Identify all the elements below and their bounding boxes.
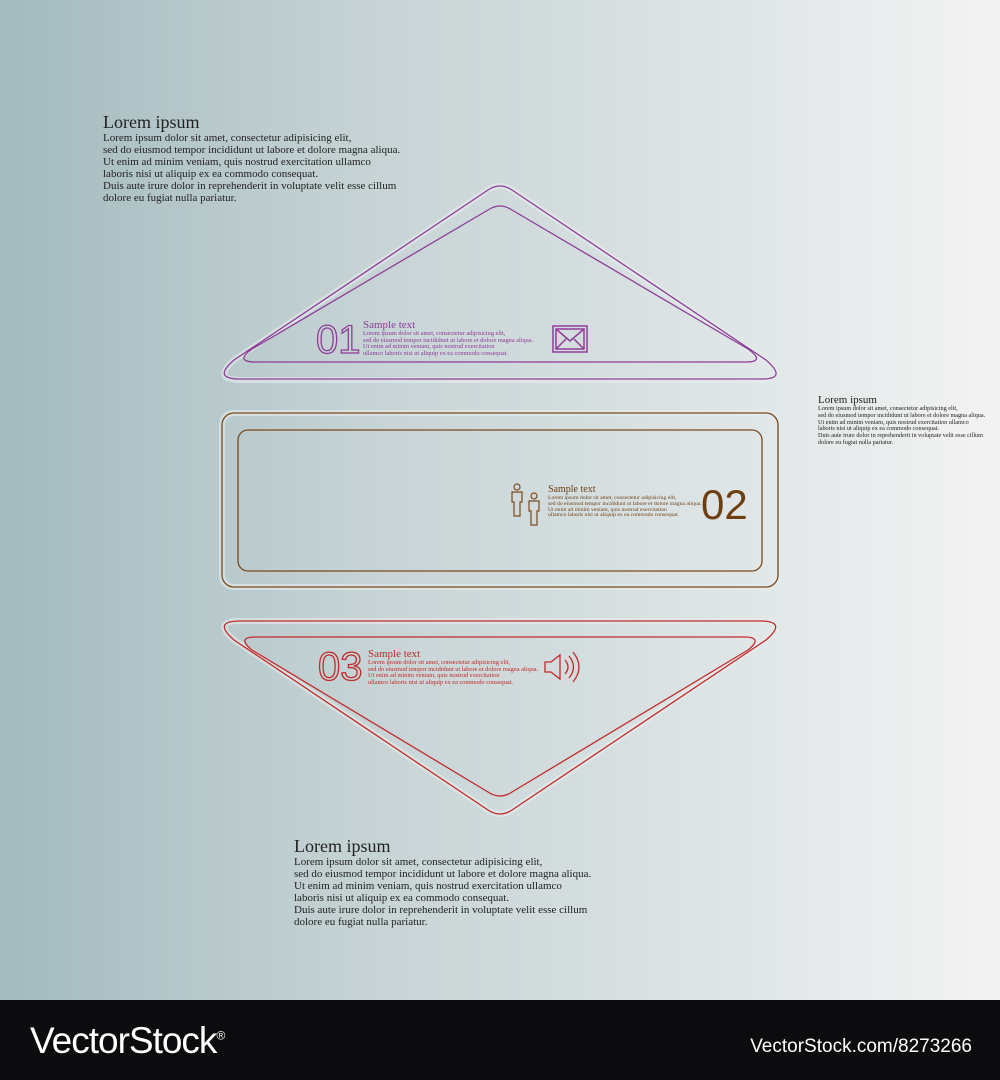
sample text 02: Ut enim ad minim veniam, quis nostrud exercitation xyxy=(548,507,667,513)
sample text 01: Ut enim ad minim veniam, quis nostrud exercitation xyxy=(363,343,495,350)
footer logo: VectorStock® xyxy=(30,1020,224,1061)
text block: bottom: sed do eiusmod tempor incididunt ut labore et dolore magna aliqua. xyxy=(294,868,591,880)
shape: bottom triangle 03 xyxy=(224,621,776,814)
icon: people xyxy=(512,484,539,525)
sample text 03: Sample text xyxy=(368,648,420,660)
footer bar xyxy=(0,1000,1000,1080)
sample text 03: Ut enim ad minim veniam, quis nostrud exercitation xyxy=(368,672,500,679)
sample text 01: ullamco laboris nisi ut aliquip ex ea commodo consequat. xyxy=(363,350,508,356)
shape: rectangle 02 xyxy=(222,413,778,587)
text block: top left: Ut enim ad minim veniam, quis nostrud exercitation ullamco xyxy=(103,156,371,168)
text block: top left: Duis aute irure dolor in reprehenderit in voluptate velit esse cillum xyxy=(103,180,396,192)
text block: bottom: laboris nisi ut aliquip ex ea commodo consequat. xyxy=(294,892,509,904)
sample text 01: sed do eiusmod tempor incididunt ut labore et dolore magna aliqua. xyxy=(363,336,533,344)
text block: bottom: Lorem ipsum xyxy=(294,836,390,856)
sample text 02: Sample text xyxy=(548,484,596,495)
text block: right: Lorem ipsum dolor sit amet, consectetur adipisicing elit, xyxy=(818,405,958,412)
text block: right: sed do eiusmod tempor incididunt ut labore et dolore magna aliqua. xyxy=(818,412,985,419)
text block: top left: Lorem ipsum dolor sit amet, consectetur adipisicing elit, xyxy=(103,132,351,144)
sample text 03 xyxy=(368,648,538,686)
sample text 02: ullamco laboris nisi ut aliquip ex ea commodo consequat. xyxy=(548,512,679,518)
text block: bottom: Duis aute irure dolor in reprehenderit in voluptate velit esse cillum xyxy=(294,904,587,916)
text block: right: Lorem ipsum xyxy=(818,394,877,406)
icon: speaker xyxy=(545,652,579,682)
text block: right xyxy=(818,394,985,446)
sample text 03: Lorem ipsum dolor sit amet, consectetur adipisicing elit, xyxy=(368,659,510,666)
text block: right: Ut enim ad minim veniam, quis nostrud exercitation ullamco xyxy=(818,419,969,426)
text block: bottom: dolore eu fugiat nulla pariatur. xyxy=(294,916,427,928)
text block: bottom: Ut enim ad minim veniam, quis nostrud exercitation ullamco xyxy=(294,880,562,892)
text block: bottom: Lorem ipsum dolor sit amet, consectetur adipisicing elit, xyxy=(294,856,542,868)
text block: top left: laboris nisi ut aliquip ex ea commodo consequat. xyxy=(103,168,318,180)
sample text 01 xyxy=(363,319,533,356)
shape: top triangle 01 xyxy=(224,186,776,380)
text block: top left: sed do eiusmod tempor incididunt ut labore et dolore magna aliqua. xyxy=(103,144,400,156)
number 03: 03 xyxy=(318,645,362,689)
icon: envelope xyxy=(553,326,587,352)
number 01: 01 xyxy=(316,318,360,362)
text block: bottom xyxy=(294,836,591,928)
sample text 02 xyxy=(548,484,702,518)
text block: top left xyxy=(103,112,400,204)
sample text 03: ullamco laboris nisi ut aliquip ex ea commodo consequat. xyxy=(368,678,513,686)
sample text 01: Sample text xyxy=(363,319,415,331)
sample text 03: sed do eiusmod tempor incididunt ut labore et dolore magna aliqua. xyxy=(368,666,538,672)
sample text 02: sed do eiusmod tempor incididunt ut labore et dolore magna aliqua. xyxy=(548,501,702,507)
text block: top left: dolore eu fugiat nulla pariatur. xyxy=(103,192,236,204)
text block: right: laboris nisi ut aliquip ex ea commodo consequat. xyxy=(818,425,939,432)
text block: right: Duis aute irure dolor in reprehenderit in voluptate velit esse cillum xyxy=(818,432,983,439)
text block: top left: Lorem ipsum xyxy=(103,112,200,132)
number 02: 02 xyxy=(701,481,748,528)
sample text 01: Lorem ipsum dolor sit amet, consectetur adipisicing elit, xyxy=(363,330,505,337)
text block: right: dolore eu fugiat nulla pariatur. xyxy=(818,439,893,446)
footer url: VectorStock.com/8273266 xyxy=(750,1036,972,1057)
sample text 02: Lorem ipsum dolor sit amet, consectetur adipisicing elit, xyxy=(548,495,676,501)
